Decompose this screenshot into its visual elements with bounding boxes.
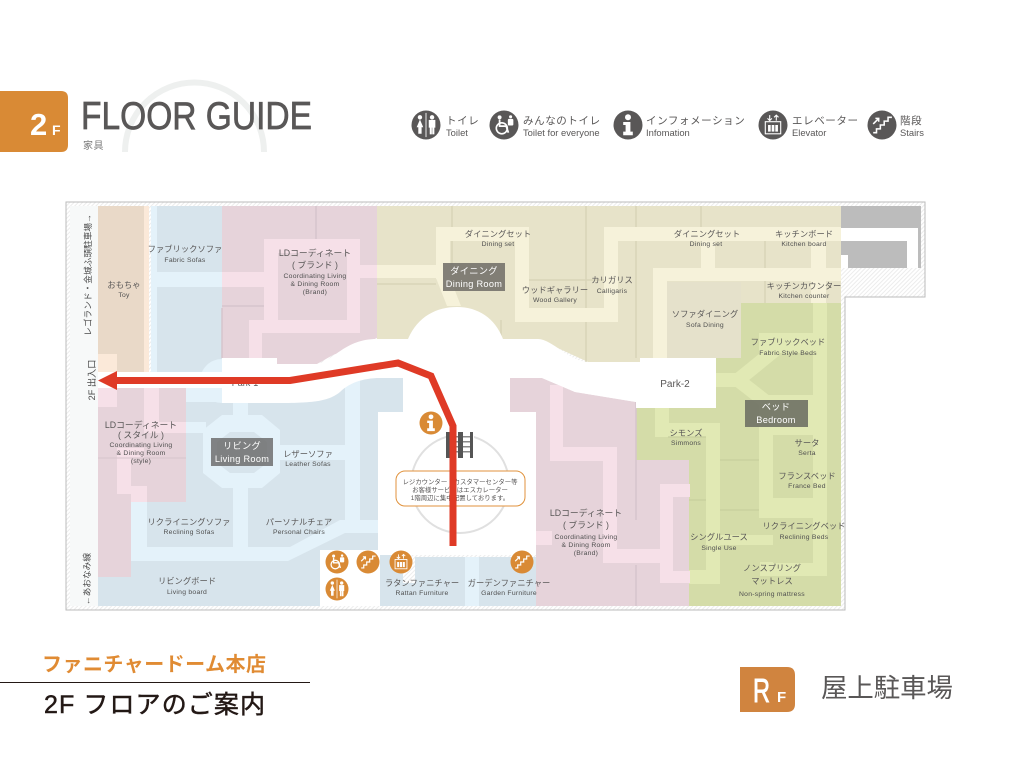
label: reclining sofas [148,517,230,536]
zone: dining [377,206,841,362]
label: LD style: ( スタイル ) [118,430,164,440]
label: wood gallery: Wood Gallery [533,297,577,304]
label: garden furniture: ガーデンファニチャー [468,578,550,588]
area tag: dining room: Dining Room [446,279,502,289]
label: fabric beds [751,337,825,357]
zone: sofas (upper blue) [151,206,222,381]
label: toy: おもちゃ [107,280,141,290]
store name: ファニチャードーム本店 [42,653,266,676]
label: LD brand lower: Coordinating Living [555,534,617,541]
label: serta [795,438,819,457]
area tag: living room [211,438,273,466]
vertical label: Aonami line: ←あおなみ線 [81,553,92,605]
label: kitchen counter: キッチンカウンター [767,281,841,291]
label: fabric beds: ファブリックベッド [751,337,825,347]
area tag: living room: Living Room [215,454,269,464]
label: dining set right: ダイニングセット [674,229,740,239]
header decorative arc [125,82,264,152]
label: non-spring mattress: ノンスプリング [743,563,801,573]
red route arrow [98,363,453,546]
label: single use: Single Use [701,545,737,552]
label: kitchen board: Kitchen board [781,241,827,248]
area tag: dining room: ダイニング [450,265,498,276]
floor map [66,202,925,610]
legend: accessible toilet [490,110,601,140]
floor guide heading: 2F フロアのご案内 [44,691,265,719]
label: france bed [778,471,836,490]
label: france bed: フランスベッド [778,471,836,481]
legend: toilet: Toilet [446,127,468,138]
legend: elevator [758,110,859,140]
label: calligaris: カリガリス [591,275,633,285]
label: living board [158,576,216,596]
label: kitchen counter: Kitchen counter [779,293,830,300]
zone: LD style pink [98,388,186,577]
label: LD brand lower: LDコーディネート [550,507,622,518]
floor badge: 2F: 2 [30,107,47,142]
label: simmons: シモンズ [669,428,703,438]
label: dining set left: Dining set [482,241,514,248]
label: simmons [669,428,703,447]
label: non-spring mattress: マットレス [751,576,793,586]
label: LD style [105,419,177,465]
rooftop badge: R [753,672,770,709]
label: kitchen board [775,229,833,248]
callout note: 1階周辺に集中配置しております。 [411,493,509,502]
floor badge: 2F [0,91,68,152]
area tag: bedroom: Bedroom [756,415,796,425]
icon: elevator [390,550,412,574]
label: single use: シングルユース [690,532,748,542]
legend [412,110,924,140]
label: living board: リビングボード [158,576,216,586]
label: reclining beds: リクライニングベッド [763,521,845,531]
legend: stairs: Stairs [900,127,924,138]
label: LD brand upper: ( ブランド ) [292,259,338,270]
mall centre ring [411,435,509,533]
label: fabric sofas: Fabric Sofas [164,257,206,264]
zone: toy [98,206,149,372]
label: non-spring mattress [739,563,805,598]
label: LD brand upper: LDコーディネート [279,247,351,258]
area tag: living room: リビング [223,440,261,451]
label: fabric beds: Fabric Style Beds [759,350,817,357]
floor badge: 2F: F [52,122,61,138]
label: kitchen board: キッチンボード [775,229,833,239]
legend: information: インフォメーション [646,115,745,127]
label: wood gallery: ウッドギャラリー [522,285,588,295]
label: sofa dining [672,309,738,329]
label: garden furniture [468,578,550,597]
label: simmons: Simmons [671,440,701,447]
label: personal chairs: パーソナルチェア [266,517,332,527]
vertical label: exit: 2F 出入口 [86,360,97,400]
label: non-spring mattress: Non-spring mattress [739,591,805,598]
label: serta: Serta [798,450,816,457]
label: calligaris [591,275,633,295]
rooftop badge: F [777,689,786,706]
label: Park-2: Park-2 [660,379,690,390]
label: LD brand upper [279,247,351,296]
icon: accessible toilet [326,550,348,574]
vertical label: Legoland: レゴランド・金城ふ頭駐車場→ [82,214,93,336]
label: LD brand lower: (Brand) [574,550,598,557]
icon: information [420,412,442,434]
label: reclining beds [763,521,845,541]
legend: accessible toilet: Toilet for everyone [523,127,600,138]
title: FLOOR GUIDE: FLOOR GUIDE [81,95,312,138]
legend: stairs: 階段 [900,114,922,127]
label: dining set left [465,229,531,248]
label: reclining sofas: リクライニングソファ [148,517,230,527]
icon: toilet [326,578,348,600]
legend: information [614,110,745,140]
label: kitchen counter [767,281,841,300]
label: Park-1: Park-1 [232,378,258,388]
label: reclining sofas: Reclining Sofas [164,529,215,536]
legend: toilet [412,110,479,140]
zone: beds [636,303,841,606]
label: dining set right [674,229,740,248]
label: sofa dining: Sofa Dining [686,322,724,329]
label: dining set left: ダイニングセット [465,229,531,239]
label: wood gallery [522,285,588,304]
legend: accessible toilet: みんなのトイレ [523,115,601,127]
callout note: レジカウンター・カスタマーセンター等 [402,477,518,486]
icon: stairs left [356,550,380,574]
label: serta: サータ [795,438,819,448]
map frame [66,202,925,610]
zone: parking area [841,206,921,268]
label: LD brand upper: Coordinating Living [284,273,346,280]
zone: lower living blue [98,359,403,606]
label: LD brand upper: (Brand) [303,289,327,296]
rooftop badge [740,667,795,712]
label: LD style: Coordinating Living [110,442,172,449]
legend: elevator: エレベーター [792,115,859,127]
label: fabric sofas: ファブリックソファ [148,244,222,254]
label: leather sofas: Leather Sofas [285,461,331,468]
callout note: お客様サービスはエスカレーター [412,485,508,494]
label: leather sofas: レザーソファ [283,449,333,459]
label: reclining beds: Reclining Beds [780,534,829,541]
label: rattan furniture [385,578,459,597]
divider line [0,682,310,683]
label: living board: Living board [167,589,207,596]
label: calligaris: Calligaris [597,288,628,295]
label: sofa dining: ソファダイニング [672,309,738,319]
label: rattan furniture: Rattan Furniture [395,590,449,597]
subtitle: furniture: 家具 [83,139,104,152]
legend: information: Infomation [646,127,690,138]
legend: toilet: トイレ [446,115,479,127]
label: LD brand upper: & Dining Room [291,281,340,288]
label: dining set right: Dining set [690,241,722,248]
label: toy [107,280,141,299]
label: france bed: France Bed [788,483,826,490]
legend: elevator: Elevator [792,127,826,138]
legend: stairs [868,110,924,140]
label: LD brand lower: ( ブランド ) [563,519,609,530]
zone: LD brand upper pink [222,206,377,364]
label: LD style: & Dining Room [117,450,166,457]
callout note [396,471,525,506]
central white area [98,307,716,606]
living paths [131,359,378,561]
label: rattan furniture: ラタンファニチャー [385,578,459,588]
label: garden furniture: Garden Furniture [481,590,537,597]
label: leather sofas [283,449,333,468]
area tag: bedroom [745,400,808,427]
octagon centre [217,432,267,473]
label: single use [690,532,748,552]
area tag: dining room [443,263,505,291]
label: toy: Toy [118,292,130,299]
label: personal chairs: Personal Chairs [273,529,325,536]
area tag: bedroom: ベッド [762,402,790,412]
label: personal chairs [266,517,332,536]
icon: stairs right [510,550,534,574]
escalator [446,432,474,458]
label: LD brand lower: & Dining Room [562,542,611,549]
zone: LD brand lower pink [510,378,690,606]
zone: rattan and garden furniture [380,557,536,606]
label: fabric sofas [148,244,222,264]
rooftop parking label: 屋上駐車場 [821,673,953,703]
label: LD style: LDコーディネート [105,419,177,430]
label: LD style: (style) [131,458,151,465]
label: LD brand lower [550,507,622,557]
